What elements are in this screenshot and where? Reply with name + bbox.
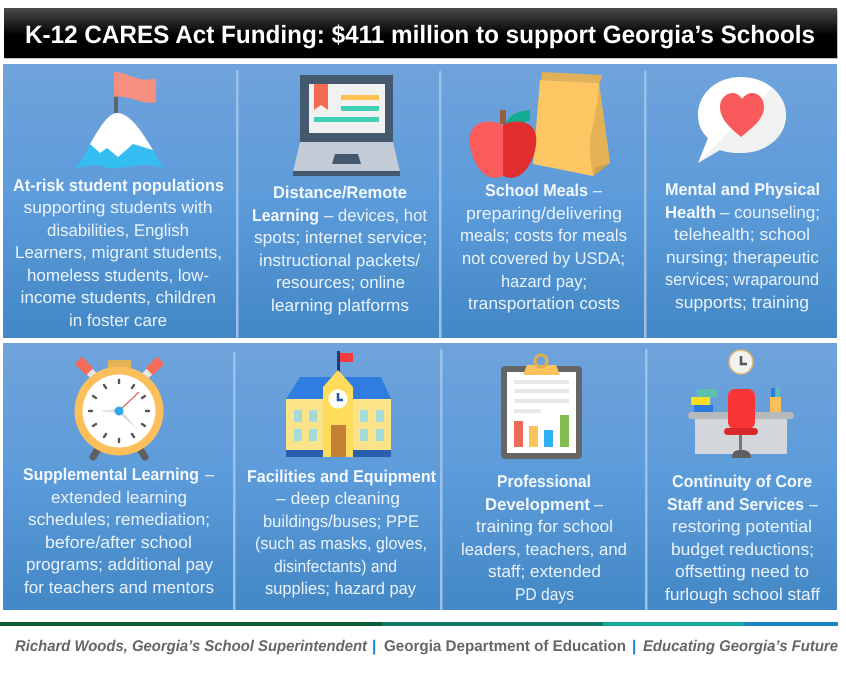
- text: supplemental learning: schedules; remediation;: [28, 510, 210, 529]
- text: continuity of core staff: Continuity of Core: [672, 472, 812, 491]
- text: at-risk: At-risk student populations: [13, 176, 224, 195]
- icon: alarm clock: [74, 357, 164, 457]
- text: supplemental learning: Supplemental Learning: [23, 465, 199, 484]
- footer text: |: [632, 638, 636, 655]
- icon: clipboard with bar chart: [501, 355, 582, 459]
- text: continuity of core staff: offsetting need to: [675, 562, 809, 581]
- text: facilities and equipment: supplies; hazard pay: [265, 579, 416, 598]
- text: mental and physical health: telehealth; school: [674, 225, 810, 244]
- text: mental and physical health: – counseling;: [720, 203, 820, 222]
- text: distance learning: learning platforms: [271, 296, 409, 315]
- text: school meals: transportation costs: [468, 294, 620, 313]
- text: distance learning: resources; online: [276, 273, 405, 292]
- text: continuity of core staff: furlough school staff: [665, 585, 820, 604]
- text: supplemental learning: –: [205, 465, 215, 484]
- panel: distance learning: [252, 75, 427, 315]
- text: facilities and equipment: [247, 467, 436, 598]
- text: distance learning: Learning: [252, 206, 319, 225]
- text: mental and physical health: Health: [665, 203, 716, 222]
- text: distance learning: instructional packets/: [259, 251, 420, 270]
- text: facilities and equipment: – deep cleaning: [276, 489, 400, 508]
- text: school meals: not covered by USDA;: [462, 249, 625, 268]
- text: at-risk: income students, children: [20, 288, 216, 307]
- text: distance learning: – devices, hot: [324, 206, 427, 225]
- panel: school meals: [460, 72, 627, 313]
- panel: mental and physical health: [665, 77, 820, 312]
- text: at-risk: supporting students with: [24, 198, 212, 217]
- text: continuity of core staff: budget reductions;: [671, 540, 814, 559]
- text: mental and physical health: nursing; therapeutic: [666, 248, 819, 267]
- icon: laptop: [293, 75, 400, 176]
- icon: school building: [286, 351, 391, 457]
- icon: desk, chair and wall clock: [688, 350, 794, 458]
- text: school meals: [460, 181, 627, 313]
- footer text: Richard Woods, Georgia’s School Superintendent: [15, 638, 368, 655]
- text: distance learning: Distance/Remote: [273, 183, 407, 202]
- text: professional development: Development: [485, 495, 590, 514]
- text: professional development: staff; extended: [488, 562, 601, 581]
- panel: continuity of core staff: [665, 350, 820, 604]
- text: continuity of core staff: [665, 472, 820, 604]
- text: professional development: leaders, teachers, and: [461, 540, 627, 559]
- text: school meals: hazard pay;: [501, 272, 587, 291]
- text: distance learning: [252, 183, 427, 315]
- footer text: |: [372, 638, 376, 655]
- text: at-risk: homeless students, low-: [27, 266, 209, 285]
- panel: supplemental learning: [23, 357, 215, 597]
- text: mental and physical health: services; wraparound: [665, 270, 819, 289]
- text: facilities and equipment: (such as masks, gloves,: [255, 534, 427, 553]
- text: professional development: PD days: [515, 585, 574, 604]
- text: continuity of core staff: –: [809, 495, 819, 514]
- text: school meals: –: [593, 181, 603, 200]
- text: continuity of core staff: Staff and Services: [667, 495, 804, 514]
- text: facilities and equipment: disinfectants) and: [274, 557, 397, 576]
- text: continuity of core staff: restoring potential: [672, 517, 812, 536]
- text: at-risk: [13, 176, 224, 330]
- text: facilities and equipment: Facilities and Equipment: [247, 467, 436, 486]
- icon: speech bubble with heart: [698, 77, 786, 163]
- text: supplemental learning: before/after school: [45, 533, 192, 552]
- text: mental and physical health: supports; training: [675, 293, 809, 312]
- text: mental and physical health: [665, 180, 820, 312]
- panel: at-risk student populations: [13, 72, 224, 330]
- text: supplemental learning: programs; additional pay: [26, 555, 213, 574]
- footer color bar: [0, 622, 838, 626]
- footer text: Educating Georgia’s Future: [643, 638, 838, 655]
- text: at-risk: in foster care: [69, 311, 167, 330]
- footer text: [15, 638, 838, 655]
- text: professional development: training for school: [476, 517, 613, 536]
- text: supplemental learning: [23, 465, 215, 597]
- icon: mountain with flag: [75, 72, 164, 168]
- text: at-risk: disabilities, English: [47, 221, 189, 240]
- text: at-risk: Learners, migrant students,: [15, 243, 222, 262]
- text: supplemental learning: extended learning: [51, 488, 187, 507]
- text: professional development: [461, 472, 627, 604]
- panel: professional development: [461, 355, 627, 604]
- footer text: Georgia Department of Education: [384, 638, 626, 655]
- title banner: [4, 8, 838, 59]
- text: school meals: meals; costs for meals: [460, 226, 627, 245]
- title banner: K-12 CARES Act Funding: $411 million to support Georgia’s Schools: [25, 21, 815, 49]
- text: professional development: –: [594, 495, 604, 514]
- text: school meals: preparing/delivering: [466, 204, 622, 223]
- text: mental and physical health: Mental and Physical: [665, 180, 820, 199]
- text: facilities and equipment: buildings/buses; PPE: [263, 512, 419, 531]
- icon: apple and lunch bag: [470, 72, 610, 178]
- text: professional development: Professional: [497, 472, 591, 491]
- text: supplemental learning: for teachers and mentors: [24, 578, 214, 597]
- text: distance learning: spots; internet service;: [254, 228, 427, 247]
- panel: facilities and equipment: [247, 351, 436, 598]
- text: school meals: School Meals: [485, 181, 588, 200]
